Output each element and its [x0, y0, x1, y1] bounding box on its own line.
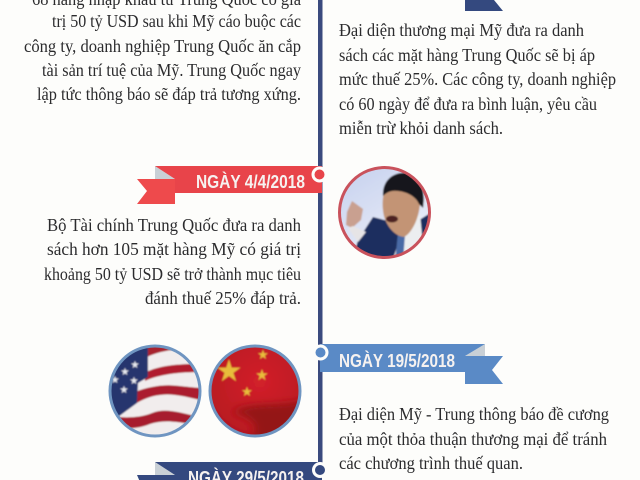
canton stars: ★ — [111, 375, 120, 386]
photo: Chinese leader portrait — [338, 166, 432, 262]
ribbon fragment: top navy tail — [465, 0, 503, 11]
timeline axis — [318, 0, 322, 470]
text block: joint US-China statement: các chương trình thuế quan. — [339, 453, 523, 473]
suit — [356, 214, 428, 256]
text block: China finance ministry response: khoảng 50 tỷ USD sẽ trở thành mục tiêu — [44, 264, 301, 284]
photo: China flag circle: ★ — [255, 366, 269, 384]
text block: US trade representative list: mức thuế 25%. Các công ty, doanh nghiệp — [339, 69, 616, 89]
photo: China flag circle: ★ — [216, 354, 242, 389]
photo: China flag circle — [208, 344, 305, 440]
text block: US trade representative list — [339, 20, 616, 138]
text block: March 2018 US tariff announcement: lập tức thông báo sẽ đáp trả tương xứng. — [37, 84, 301, 104]
text block: US trade representative list: có 60 ngày để đưa ra bình luận, yêu cầu — [339, 94, 597, 114]
text block: joint US-China statement: của một thỏa thuận thương mại để tránh — [339, 429, 607, 449]
date ribbon: 19/5/2018 — [314, 344, 503, 384]
canton stars: ★ — [120, 385, 129, 396]
text block: March 2018 US tariff announcement: tài sản trí tuệ của Mỹ. Trung Quốc ngay — [42, 60, 301, 80]
text block: China finance ministry response — [44, 215, 301, 308]
text block: US trade representative list: sách các mặt hàng Trung Quốc sẽ bị áp — [339, 45, 595, 65]
text block: China finance ministry response: sách hơn 105 mặt hàng Mỹ có giá trị — [47, 239, 301, 259]
date ribbon: 29/5/2018 — [137, 462, 326, 480]
date ribbon: 4/4/2018 — [137, 166, 326, 204]
canton — [112, 348, 149, 417]
date ribbon: 19/5/2018: NGÀY 19/5/2018 — [339, 350, 455, 371]
text block: joint US-China statement: Đại diện Mỹ - Trung thông báo đề cương — [339, 404, 609, 424]
text block: March 2018 US tariff announcement: trị 50 tỷ USD sau khi Mỹ cáo buộc các — [52, 11, 301, 31]
photo: China flag circle: ★ — [241, 385, 253, 400]
text block: US trade representative list: Đại diện thương mại Mỹ đưa ra danh — [339, 20, 584, 40]
text block: US trade representative list: miễn trừ khỏi danh sách. — [339, 118, 503, 138]
text block: March 2018 US tariff announcement: công ty, doanh nghiệp Trung Quốc ăn cắp — [24, 36, 301, 56]
photo: US flag circle — [108, 344, 202, 438]
text block: joint US-China statement — [339, 404, 609, 473]
text block: China finance ministry response: Bộ Tài chính Trung Quốc đưa ra danh — [47, 215, 301, 235]
canton stars: ★ — [121, 367, 130, 378]
photo: China flag circle: ★ — [257, 348, 269, 363]
canton stars: ★ — [130, 376, 139, 387]
text block: China finance ministry response: đánh thuế 25% đáp trả. — [145, 288, 301, 308]
text block: March 2018 US tariff announcement — [24, 0, 301, 104]
canton stars: ★ — [131, 360, 140, 371]
red stripes — [146, 348, 172, 357]
date ribbon: 4/4/2018: NGÀY 4/4/2018 — [196, 171, 305, 192]
canton stars — [112, 360, 140, 394]
